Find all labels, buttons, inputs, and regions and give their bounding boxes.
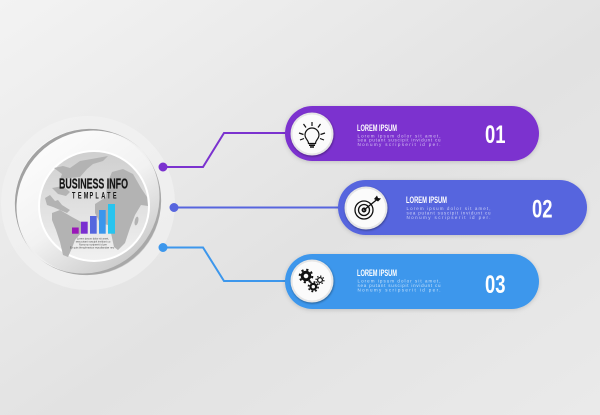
panel: step 02	[338, 180, 587, 235]
panel: step 01	[285, 106, 539, 161]
title: business info: BUSINESS INFO	[59, 176, 128, 192]
heading: LOREM IPSUM	[357, 268, 397, 278]
body text: Lorem ipsum dolor sit amet,	[358, 134, 440, 138]
panel: step 03	[285, 254, 539, 309]
heading: LOREM IPSUM	[406, 195, 447, 205]
panel: central globe badge	[1, 116, 175, 290]
connector 2	[170, 204, 340, 211]
icon: gears	[290, 260, 334, 302]
caption text: Ex quis theophrastus repudiandae nec	[70, 246, 115, 250]
caption text: sea putant suscipit invidunt cu	[76, 240, 111, 244]
number: 02	[532, 196, 552, 224]
connector 1	[160, 133, 290, 170]
number: 03	[485, 271, 506, 299]
body text	[358, 278, 441, 292]
heading: LOREM IPSUM	[357, 123, 397, 133]
body text: Nonumy scripserit id per.	[406, 215, 490, 220]
caption text	[70, 236, 115, 250]
caption text: Nonumy scripserit id per	[79, 242, 107, 246]
icon: light bulb	[290, 112, 334, 156]
body text: Nonumy scripserit id per.	[358, 142, 440, 147]
globe map	[45, 156, 148, 257]
body text	[406, 206, 491, 220]
body text: Lorem ipsum dolor sit amet,	[406, 206, 490, 211]
number: 01	[485, 121, 506, 149]
body text	[358, 134, 441, 147]
subtitle: template: TEMPLATE	[72, 190, 117, 201]
body text: sea putant suscipit invidunt cu	[406, 210, 491, 216]
body text: Nonumy scripserit id per.	[358, 288, 440, 292]
body text: Lorem ipsum dolor sit amet,	[358, 278, 440, 284]
icon: target	[344, 186, 388, 230]
body text: sea putant suscipit invidunt cu	[358, 283, 441, 288]
bar chart	[72, 204, 115, 234]
caption text: Lorem ipsum dolor sit amet,	[77, 236, 109, 240]
connector 3	[160, 244, 290, 281]
body text: sea putant suscipit invidunt cu	[358, 138, 441, 142]
